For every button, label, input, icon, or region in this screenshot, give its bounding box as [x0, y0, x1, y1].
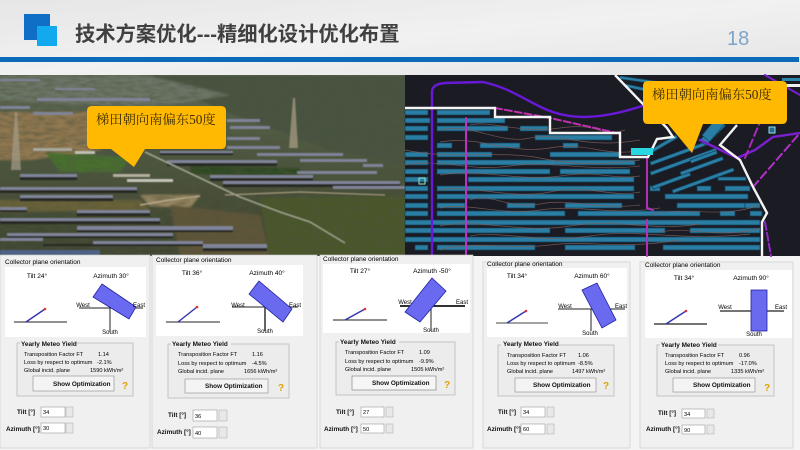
panel: orientation dialog 2: Tilt 36°: [182, 269, 203, 277]
yield box: 0.96: [739, 353, 750, 359]
yield box: Transposition Factor FT: [178, 352, 238, 358]
yield box: Global incid. plane: [178, 369, 224, 375]
yield box: Global incid. plane: [24, 368, 70, 374]
tilt diagram: [496, 310, 548, 323]
azimuth diagram: [76, 284, 145, 336]
panel: orientation dialog 1: [0, 255, 150, 448]
optimization button: [673, 378, 755, 392]
header rule: [0, 57, 799, 62]
yield box: Yearly Meteo Yield: [503, 341, 559, 348]
panel: orientation dialog 4: [483, 261, 630, 448]
azimuth diagram: South: [423, 328, 439, 334]
azimuth diagram: [231, 281, 301, 335]
yield box: [657, 342, 774, 396]
yield box: Transposition Factor FT: [24, 352, 84, 358]
azimuth diagram: East: [615, 304, 627, 310]
CAD layout drawing: [405, 75, 800, 256]
panel: orientation dialog 1: Azimuth 30°: [93, 272, 129, 280]
yield box: [498, 341, 614, 396]
panel: orientation dialog 4: Azimuth 60°: [574, 272, 610, 280]
header band: [0, 0, 800, 75]
photo: terraced solar farm: [0, 70, 411, 260]
callout: left photo: [87, 106, 226, 167]
yield box: Loss by respect to optimum: [345, 359, 414, 365]
azimuth diagram: West: [398, 300, 412, 306]
tilt and azimuth inputs: 90: [684, 428, 690, 434]
yield box: 1656 kWh/m²: [244, 369, 277, 375]
tilt diagram: [166, 306, 220, 322]
panel: orientation dialog 2: [152, 255, 317, 448]
yield box: 1.14: [98, 352, 109, 358]
tilt diagram: [333, 308, 387, 320]
panel: orientation dialog 5: Collector plane orientation: [645, 262, 721, 269]
tilt and azimuth inputs: 30: [43, 426, 49, 432]
panel: orientation dialog 4: Tilt 34°: [507, 272, 528, 280]
panel: orientation dialog 1: Tilt 24°: [27, 272, 48, 280]
tilt and azimuth inputs: 34: [523, 410, 529, 416]
tilt and azimuth inputs: [487, 407, 554, 434]
tilt diagram: [14, 308, 67, 322]
yield box: [336, 339, 455, 395]
panel: orientation dialog 3: Azimuth -50°: [413, 267, 451, 275]
azimuth diagram: [718, 290, 787, 338]
yield box: 1505 kWh/m²: [411, 367, 444, 373]
tilt and azimuth inputs: [324, 407, 393, 433]
azimuth diagram: West: [76, 303, 90, 309]
help icon: ?: [444, 380, 450, 391]
yield box: -8.5%: [578, 361, 593, 367]
white site boundary: [405, 75, 767, 256]
tilt and azimuth inputs: 34: [684, 412, 690, 418]
tilt and azimuth inputs: Tilt [°]: [336, 408, 354, 416]
tilt and azimuth inputs: [6, 407, 73, 433]
tilt and azimuth inputs: 60: [523, 427, 529, 433]
tilt and azimuth inputs: Azimuth [°]: [487, 425, 521, 433]
PV rows west block: [405, 110, 762, 250]
photo texture: [0, 75, 406, 256]
tilt and azimuth inputs: 40: [195, 431, 201, 437]
panel: orientation dialog 3: Tilt 27°: [350, 267, 371, 275]
optimization button: Show Optimization: [53, 381, 111, 388]
azimuth diagram: West: [718, 305, 732, 311]
tilt and azimuth inputs: Azimuth [°]: [646, 425, 680, 433]
yield box: Loss by respect to optimum: [665, 361, 734, 367]
panel: orientation dialog 4: Collector plane orientation: [487, 261, 563, 268]
yield box: Yearly Meteo Yield: [21, 341, 77, 348]
panel: orientation dialog 5: Azimuth 90°: [733, 274, 769, 282]
tilt and azimuth inputs: [157, 410, 227, 438]
tilt and azimuth inputs: [646, 409, 714, 434]
yield box: 1.16: [252, 352, 263, 358]
panel: orientation dialog 1: Collector plane orientation: [5, 259, 81, 266]
azimuth diagram: [558, 283, 627, 337]
road: [145, 152, 345, 243]
yield box: Yearly Meteo Yield: [340, 339, 396, 346]
azimuth diagram: South: [257, 329, 273, 335]
yield box: -4.5%: [252, 361, 267, 367]
pylons: [11, 98, 298, 170]
panel: orientation dialog 3: Collector plane orientation: [323, 256, 399, 263]
tilt and azimuth inputs: Azimuth [°]: [324, 425, 358, 433]
azimuth diagram: East: [456, 300, 468, 306]
yield box: 1590 kWh/m²: [90, 368, 123, 374]
yield box: -2.1%: [97, 360, 112, 366]
tilt and azimuth inputs: Azimuth [°]: [157, 428, 191, 436]
PV rows east fan: [620, 76, 746, 193]
tilt and azimuth inputs: Tilt [°]: [17, 408, 35, 416]
optimization button: Show Optimization: [533, 382, 591, 389]
yield box: Yearly Meteo Yield: [661, 342, 717, 349]
yield box: Global incid. plane: [345, 367, 391, 373]
panel: orientation dialog 2: Collector plane orientation: [156, 257, 232, 264]
tilt and azimuth inputs: Tilt [°]: [498, 408, 516, 416]
tilt and azimuth inputs: 27: [363, 410, 369, 416]
yield box: Loss by respect to optimum: [507, 361, 576, 367]
callout: left photo: 梯田朝向南偏东50度: [96, 111, 216, 127]
yield box: Global incid. plane: [665, 369, 711, 375]
azimuth diagram: South: [582, 331, 598, 337]
purple access roads: [432, 75, 800, 256]
icon: overlapping blue squares: [24, 14, 57, 46]
panel: orientation dialog 5: Tilt 34°: [674, 274, 695, 282]
callout: right drawing: [643, 81, 787, 153]
azimuth diagram: West: [231, 303, 245, 309]
optimization button: [185, 379, 268, 393]
title: 技术方案优化---精细化设计优化布置: [75, 22, 399, 46]
yield box: -17.0%: [739, 361, 757, 367]
help icon: ?: [603, 381, 609, 392]
help icon: ?: [764, 383, 770, 394]
yield box: Transposition Factor FT: [665, 353, 725, 359]
azimuth diagram: South: [746, 332, 762, 338]
yield box: Transposition Factor FT: [345, 350, 405, 356]
yield box: Transposition Factor FT: [507, 353, 567, 359]
tilt and azimuth inputs: Tilt [°]: [658, 409, 676, 417]
optimization button: [33, 376, 114, 391]
equipment markers: [419, 78, 800, 184]
yield box: -9.9%: [419, 359, 434, 365]
tilt and azimuth inputs: Azimuth [°]: [6, 425, 40, 433]
azimuth diagram: [398, 278, 468, 334]
panel: orientation dialog 3: [320, 255, 473, 448]
optimization button: Show Optimization: [372, 380, 430, 387]
azimuth diagram: East: [289, 303, 301, 309]
yield box: Global incid. plane: [507, 369, 553, 375]
tilt and azimuth inputs: 36: [195, 414, 201, 420]
optimization button: [352, 376, 436, 390]
yield box: 1497 kWh/m²: [572, 369, 605, 375]
page number: 18: [727, 28, 749, 50]
callout: right drawing: 梯田朝向南偏东50度: [652, 86, 772, 102]
yield box: [17, 340, 133, 396]
help icon: ?: [278, 383, 284, 394]
tilt diagram: [654, 310, 707, 324]
azimuth diagram: East: [133, 303, 145, 309]
yield box: Yearly Meteo Yield: [172, 341, 228, 348]
contour lines: [405, 124, 760, 250]
yield box: 1.09: [419, 350, 430, 356]
help icon: ?: [122, 381, 128, 392]
tilt and azimuth inputs: Tilt [°]: [168, 411, 186, 419]
azimuth diagram: West: [558, 304, 572, 310]
azimuth diagram: South: [102, 330, 118, 336]
optimization button: Show Optimization: [205, 383, 263, 390]
tilt and azimuth inputs: 50: [363, 427, 369, 433]
yield box: 1335 kWh/m²: [731, 369, 764, 375]
yield box: Loss by respect to optimum: [24, 360, 93, 366]
optimization button: [515, 378, 596, 392]
terrace rows: [0, 79, 406, 256]
yield box: Loss by respect to optimum: [178, 361, 247, 367]
azimuth diagram: East: [775, 305, 787, 311]
panel: orientation dialog 2: Azimuth 40°: [249, 269, 285, 277]
yield box: 1.06: [578, 353, 589, 359]
panel: orientation dialog 5: [640, 262, 793, 448]
yield box: [168, 341, 289, 398]
tilt and azimuth inputs: 34: [43, 410, 49, 416]
optimization button: Show Optimization: [693, 382, 751, 389]
